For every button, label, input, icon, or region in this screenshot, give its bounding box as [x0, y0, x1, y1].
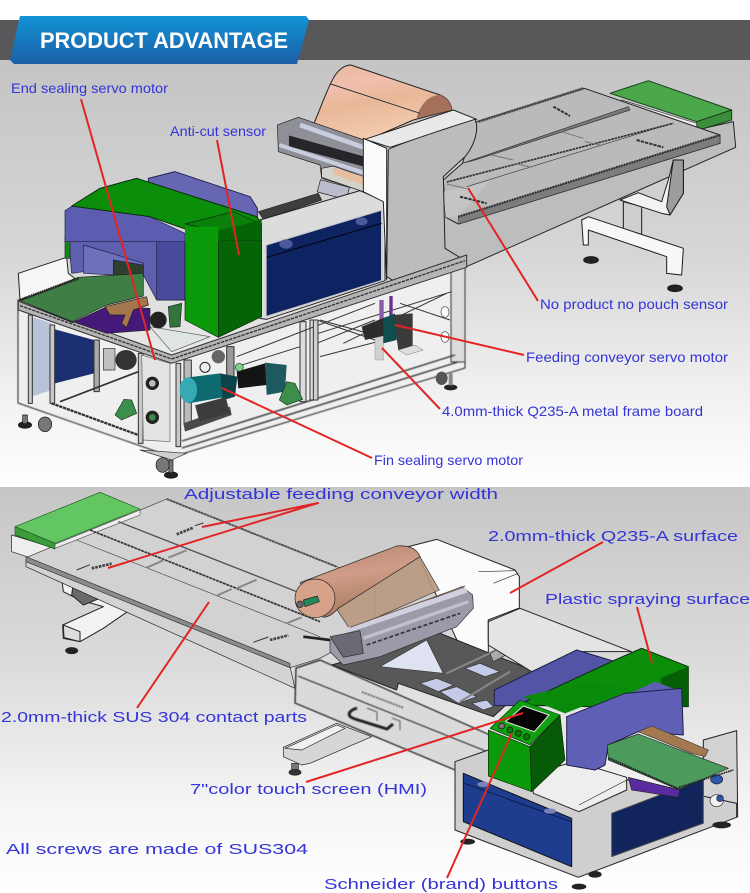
caster: [436, 372, 457, 390]
left bench: [443, 182, 488, 217]
heading banner: [10, 16, 309, 64]
label: Plastic spraying surface: Plastic spraying surface: [545, 591, 750, 608]
bottom double rail: [182, 355, 458, 448]
purple poles: [375, 296, 393, 360]
black servo with gearbox: [237, 363, 287, 395]
sealing frame rollers: [303, 586, 473, 665]
frame posts: [28, 315, 315, 447]
rails and slots: [26, 499, 337, 668]
drawer cover: [295, 660, 490, 778]
front leg: [283, 723, 372, 775]
purple opening: [602, 682, 682, 707]
rear base: [488, 608, 540, 673]
machine: lower view, hood top: [488, 608, 688, 707]
cross rails: [318, 292, 452, 357]
white cover: [532, 762, 627, 812]
cabinet base: [455, 750, 737, 877]
film roll: [313, 65, 452, 142]
upper cabinet edge: [18, 257, 77, 300]
green top: [518, 648, 688, 707]
hood shadow glass: [150, 327, 210, 352]
conveyor rails: [447, 88, 720, 224]
sealing frame: [277, 117, 364, 192]
front purple hood: [567, 688, 683, 770]
panel: bottom background: [0, 487, 750, 893]
machine: lower view, drawer leg: [283, 723, 372, 775]
outfeed conveyor: [19, 273, 182, 333]
machine: top view, feeding conveyor: [443, 81, 736, 292]
conveyor plate: [443, 88, 720, 224]
conveyor underbody: [26, 560, 295, 688]
machine: lower view, front unit: [455, 682, 738, 890]
feet: [460, 822, 731, 890]
inner post: [313, 320, 318, 400]
green bearing blocks: [115, 363, 303, 420]
machine: top view, right frame: [313, 292, 457, 400]
panel: top background: [0, 60, 750, 487]
lower rails: [52, 303, 375, 435]
green end block: [610, 81, 732, 131]
teal sealing motor: [180, 373, 237, 432]
frame panel: [18, 260, 465, 457]
label: No product no pouch sensor: No product no pouch sensor: [540, 296, 728, 312]
green top: [72, 178, 262, 233]
panel glass: [32, 317, 52, 397]
label: Adjustable feeding conveyor width: Adjustable feeding conveyor width: [184, 486, 498, 503]
machine: lower view, central unit: [295, 539, 540, 717]
drawer top line: [298, 676, 488, 752]
label: Anti-cut sensor: Anti-cut sensor: [170, 123, 266, 139]
buttons: [499, 723, 530, 740]
control tower: [488, 700, 565, 792]
title: PRODUCT ADVANTAGE: [40, 28, 288, 53]
brown guide: [638, 726, 708, 757]
conveyor body: [443, 122, 736, 267]
bottom foot plate: [140, 450, 187, 460]
label: Schneider buttons: Schneider (brand) buttons: [324, 876, 558, 893]
end sealing plate: [142, 355, 170, 442]
support leg: [582, 160, 683, 292]
cable ports: [441, 307, 449, 342]
right post: [451, 262, 465, 362]
bag former blue plates: [420, 644, 510, 710]
label: metal frame board: 4.0mm-thick Q235-A metal frame board: [442, 403, 703, 419]
machine: top view, hood top: [65, 172, 262, 242]
green end block: [15, 492, 140, 549]
label: Q235-A surface: 2.0mm-thick Q235-A surface: [488, 528, 738, 545]
green top band: [523, 682, 628, 713]
vent circles: [710, 775, 723, 807]
rear purple hood: [494, 650, 615, 706]
machine: lower view, drawer: [295, 660, 490, 778]
conveyor plate: [26, 499, 375, 668]
front purple hood: [65, 191, 185, 242]
machine: lower view, feeding conveyor: [12, 492, 375, 688]
head housing: [363, 110, 477, 281]
drawer vent: [362, 692, 404, 708]
purple hood: [65, 237, 185, 300]
dark plate: [332, 633, 540, 717]
rear purple hood: [148, 172, 257, 233]
note: screws: All screws are made of SUS304: [6, 841, 308, 858]
touch screen: [506, 706, 549, 732]
green cabinet tower: [185, 237, 262, 337]
feeding servo motor: [362, 313, 423, 355]
header band: [0, 20, 750, 60]
drawer handle: [349, 708, 393, 729]
outfeed conveyor: [607, 734, 733, 789]
right side panel: [703, 731, 738, 828]
label: Feeding conveyor servo motor: Feeding conveyor servo motor: [526, 349, 728, 365]
green tower top: [185, 212, 262, 241]
white head housing: [408, 539, 519, 653]
caster wheels: [18, 415, 178, 478]
navy panel: [55, 329, 94, 383]
film roll: [295, 546, 420, 618]
table rail: [18, 255, 467, 363]
machine: top view, central unit: [258, 65, 477, 319]
drawer clips: [367, 708, 400, 730]
rollers: [258, 180, 349, 219]
callout lines: [81, 99, 652, 878]
label: Fin sealing servo motor: Fin sealing servo motor: [374, 452, 523, 468]
leg stand: [62, 578, 130, 654]
label: touch screen: 7"color touch screen (HMI): [190, 781, 427, 798]
base cabinet: [260, 191, 385, 319]
label: SUS 304 contact parts: 2.0mm-thick SUS 304 contact parts: [1, 709, 307, 726]
rear table: [488, 608, 632, 672]
film: [335, 557, 439, 629]
side navy panel: [612, 778, 703, 857]
front navy panel: [463, 773, 572, 867]
machine: top view, lower frame: [18, 237, 467, 478]
gearwheels: [146, 350, 225, 424]
rear servo motor: [103, 348, 137, 370]
former triangle: [380, 640, 443, 673]
white end box: [12, 535, 55, 558]
purple mount: [628, 777, 680, 797]
label: End sealing servo motor: End sealing servo motor: [11, 80, 168, 96]
machine: top view, frame body: [18, 260, 465, 457]
